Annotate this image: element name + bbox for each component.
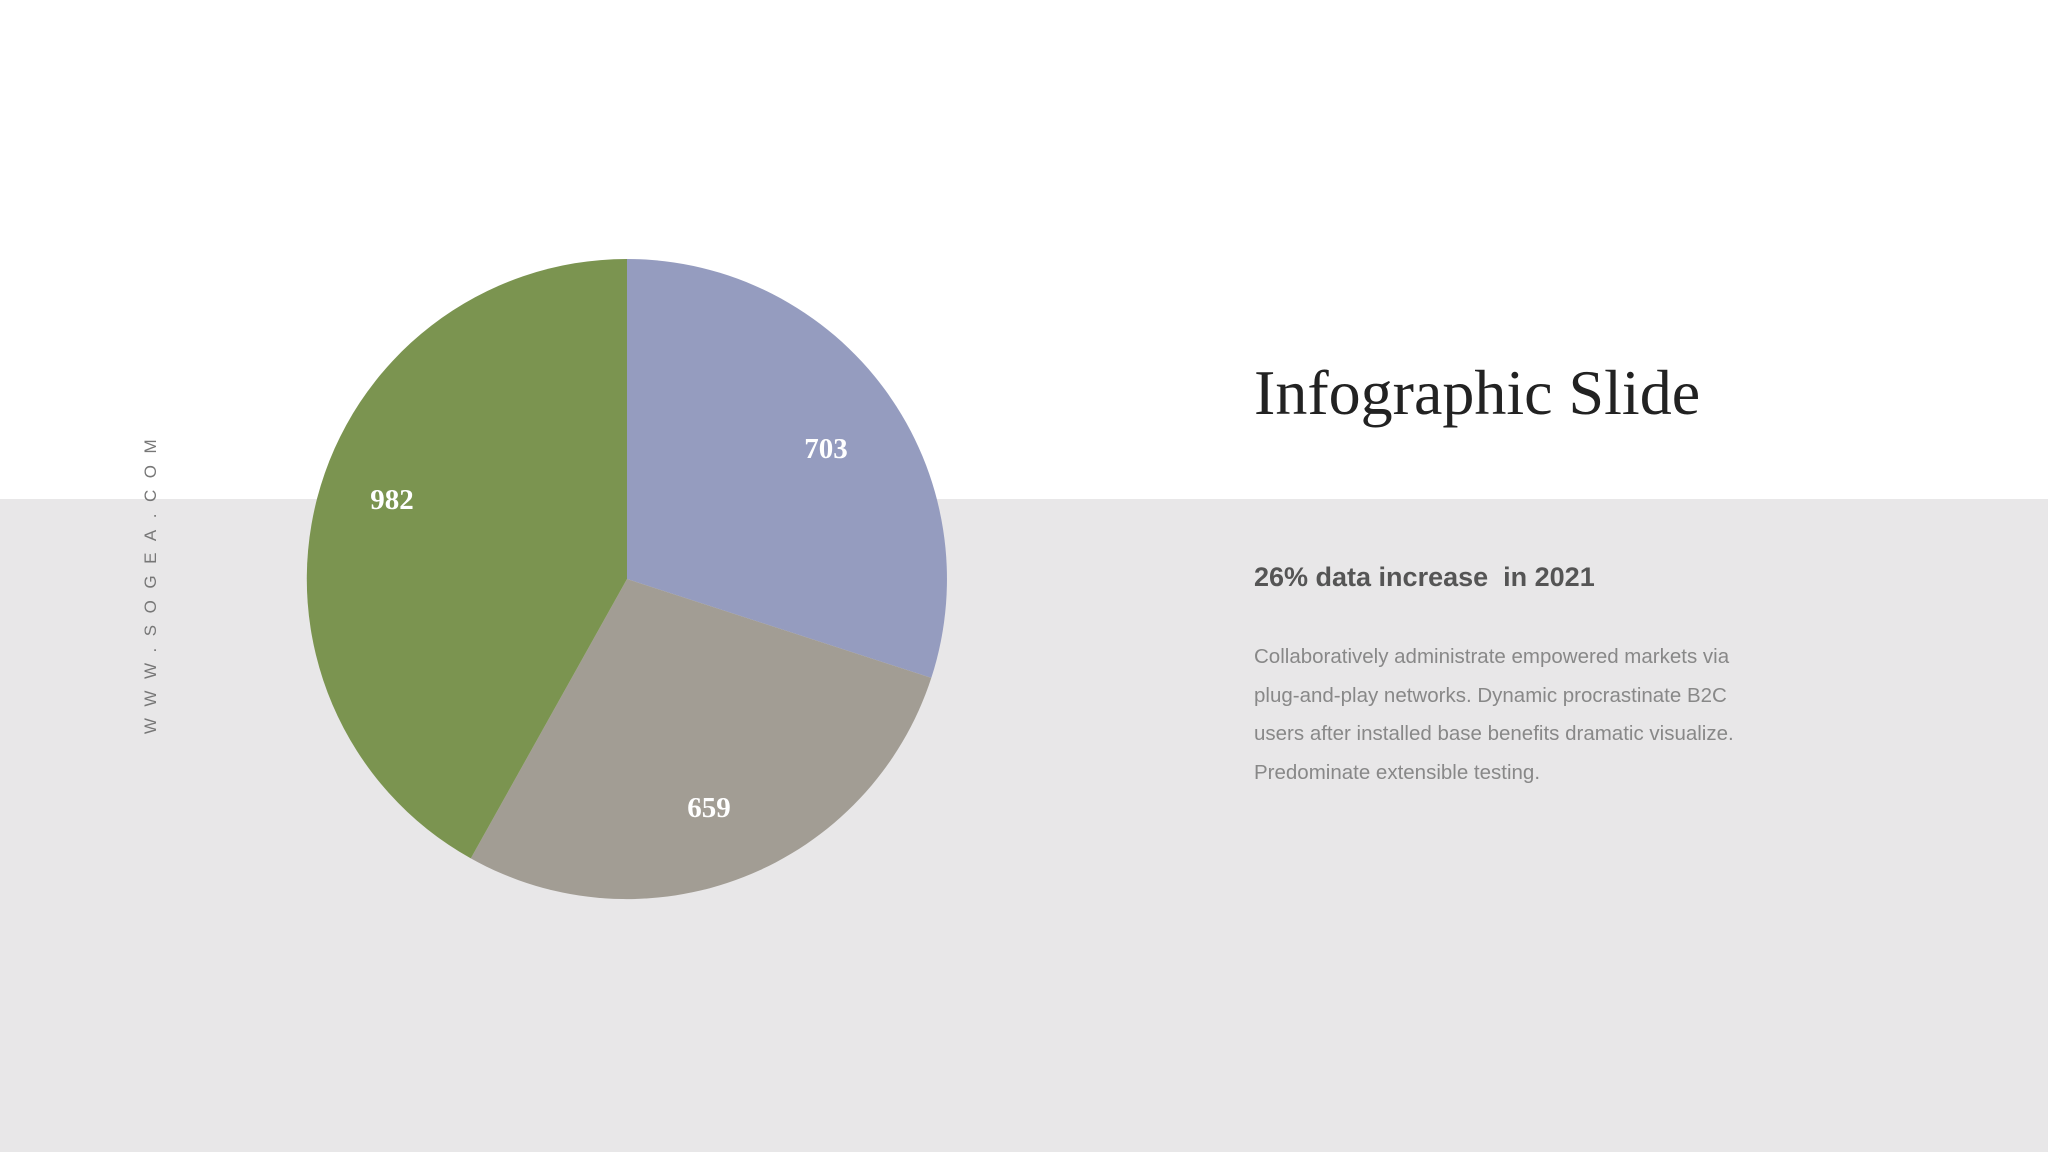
label 703: 703 [804,433,848,465]
slice: 982 [307,259,627,858]
title: Infographic Slide [1254,357,1700,428]
label 659: 659 [687,792,731,824]
side text: website: WWW.SOGEA.COM [141,428,160,734]
body text: users after installed base benefits dramatic visualize. [1254,722,1734,745]
body text [1254,645,1734,784]
body text: plug-and-play networks. Dynamic procrastinate B2C [1254,684,1727,706]
slice: 659 [471,579,931,899]
body text: Collaboratively administrate empowered markets via [1254,645,1729,668]
subtitle: 26% data increase in 2021 [1254,562,1595,592]
label 982: 982 [370,484,414,516]
body text: Predominate extensible testing. [1254,760,1540,784]
slice: 703 [627,259,947,678]
